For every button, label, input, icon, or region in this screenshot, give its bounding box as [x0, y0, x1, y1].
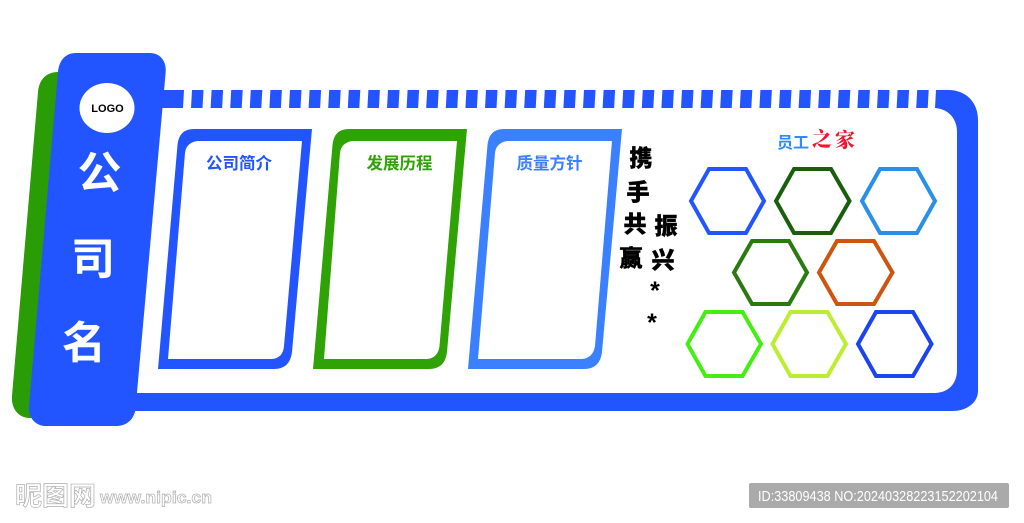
slogan text: *	[647, 309, 657, 337]
image id badge	[749, 483, 1009, 508]
slogan text: 兴	[652, 247, 674, 273]
logo badge	[80, 83, 134, 133]
hexagon 1	[691, 169, 764, 233]
label: quality policy: 质量方针	[516, 153, 582, 173]
heading: staff home: 之	[812, 123, 832, 152]
slogan text: 手	[626, 179, 650, 205]
slogan text: 共	[624, 211, 646, 237]
slogan text: 振	[654, 213, 678, 239]
panel: development history	[313, 129, 467, 369]
watermark: nipic: www.nipic.cn	[99, 488, 212, 507]
slogan text: 携	[630, 145, 652, 171]
hexagon 5	[819, 241, 892, 304]
heading: staff home	[777, 123, 855, 153]
hexagon 7	[772, 312, 846, 376]
watermark: nipic: 昵图网	[15, 481, 96, 511]
panel: green backing tab	[12, 72, 90, 418]
heading: staff home: 家	[835, 124, 855, 153]
hexagon 2	[776, 169, 850, 233]
panel: quality policy	[468, 129, 622, 369]
label: development history: 发展历程	[366, 153, 432, 173]
hexagon 8	[858, 312, 932, 376]
label: company profile: 公司简介	[206, 153, 272, 173]
hexagon 4	[734, 241, 807, 304]
title: company name: 名	[62, 319, 106, 368]
logo badge: LOGO	[91, 103, 124, 115]
watermark: nipic	[15, 481, 212, 511]
title: company name: 司	[71, 235, 115, 284]
image id badge: ID:33809438 NO:20240328223152202104	[758, 489, 998, 505]
title: company name	[62, 149, 122, 368]
hexagon 3	[862, 169, 935, 233]
panel: main frame	[130, 90, 978, 411]
slogan text: *	[650, 277, 660, 305]
panel: blue name tab	[29, 53, 166, 426]
hexagon grid	[688, 169, 935, 376]
panel: company profile	[158, 129, 312, 369]
slogan text	[620, 145, 678, 337]
title: company name: 公	[78, 149, 122, 198]
hexagon 6	[688, 312, 761, 376]
heading: staff home: 员工	[777, 135, 809, 152]
slogan text: 赢	[620, 245, 642, 271]
